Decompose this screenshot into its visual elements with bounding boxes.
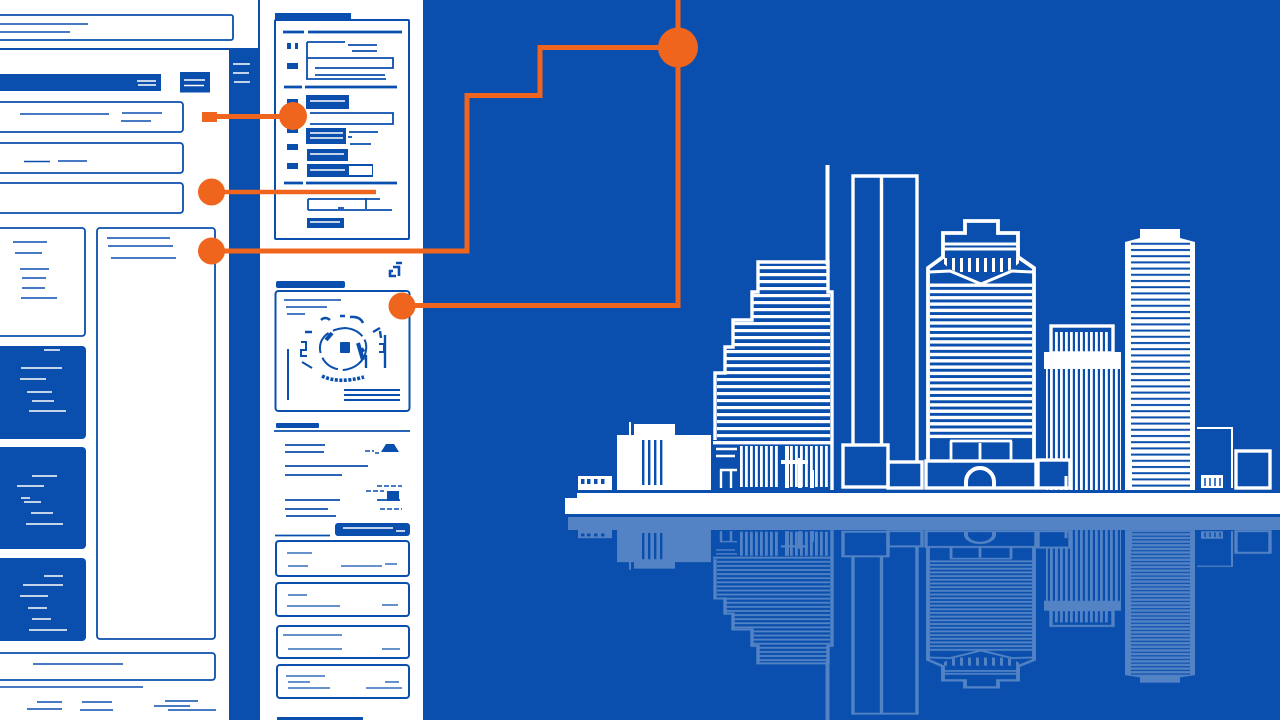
- list row 1: [0, 102, 183, 132]
- gauge card: [276, 281, 410, 411]
- bottom wide box: [0, 653, 215, 680]
- result card 4: [277, 665, 409, 698]
- details section: [274, 423, 410, 536]
- connector: row to form card: [202, 102, 307, 130]
- top search box: [0, 15, 233, 40]
- divider line: [0, 0, 259, 49]
- dark card 2: [0, 447, 86, 549]
- city skyline: [578, 165, 1270, 490]
- action button: [335, 523, 410, 536]
- chart: circular gauge: [288, 316, 385, 400]
- bottom text lines: [0, 664, 216, 710]
- icon: small glyph: [390, 263, 402, 276]
- connector: content panel to hub: [198, 48, 678, 264]
- panel: main document page: [0, 0, 259, 720]
- hub node: [658, 28, 698, 68]
- skyline base platform: [565, 493, 1280, 514]
- result card 2: [276, 583, 409, 616]
- list row 3: [0, 183, 183, 213]
- dark card 3: [0, 558, 86, 641]
- connector lines: [198, 0, 698, 320]
- left info card: [0, 228, 85, 336]
- connector: gauge to hub: [388, 0, 678, 320]
- list rows text lines: [13, 113, 176, 298]
- result cards: [276, 541, 409, 698]
- result text lines: [283, 553, 402, 688]
- dark card 1: [0, 346, 86, 439]
- top box text lines: [0, 24, 88, 32]
- form card: [275, 13, 409, 239]
- panel: right document column: [260, 0, 423, 720]
- dark header bar: [0, 74, 161, 91]
- header button: [180, 72, 210, 92]
- list row 2: [0, 143, 183, 173]
- tall content panel: [97, 228, 215, 639]
- connector: row to form field: [198, 178, 376, 206]
- skyline reflection: [568, 517, 1280, 720]
- result card 1: [276, 541, 409, 576]
- result card 3: [277, 626, 409, 658]
- sidebar strip: [229, 49, 259, 720]
- header bar lines: [137, 81, 156, 85]
- bottom tab: [277, 717, 363, 720]
